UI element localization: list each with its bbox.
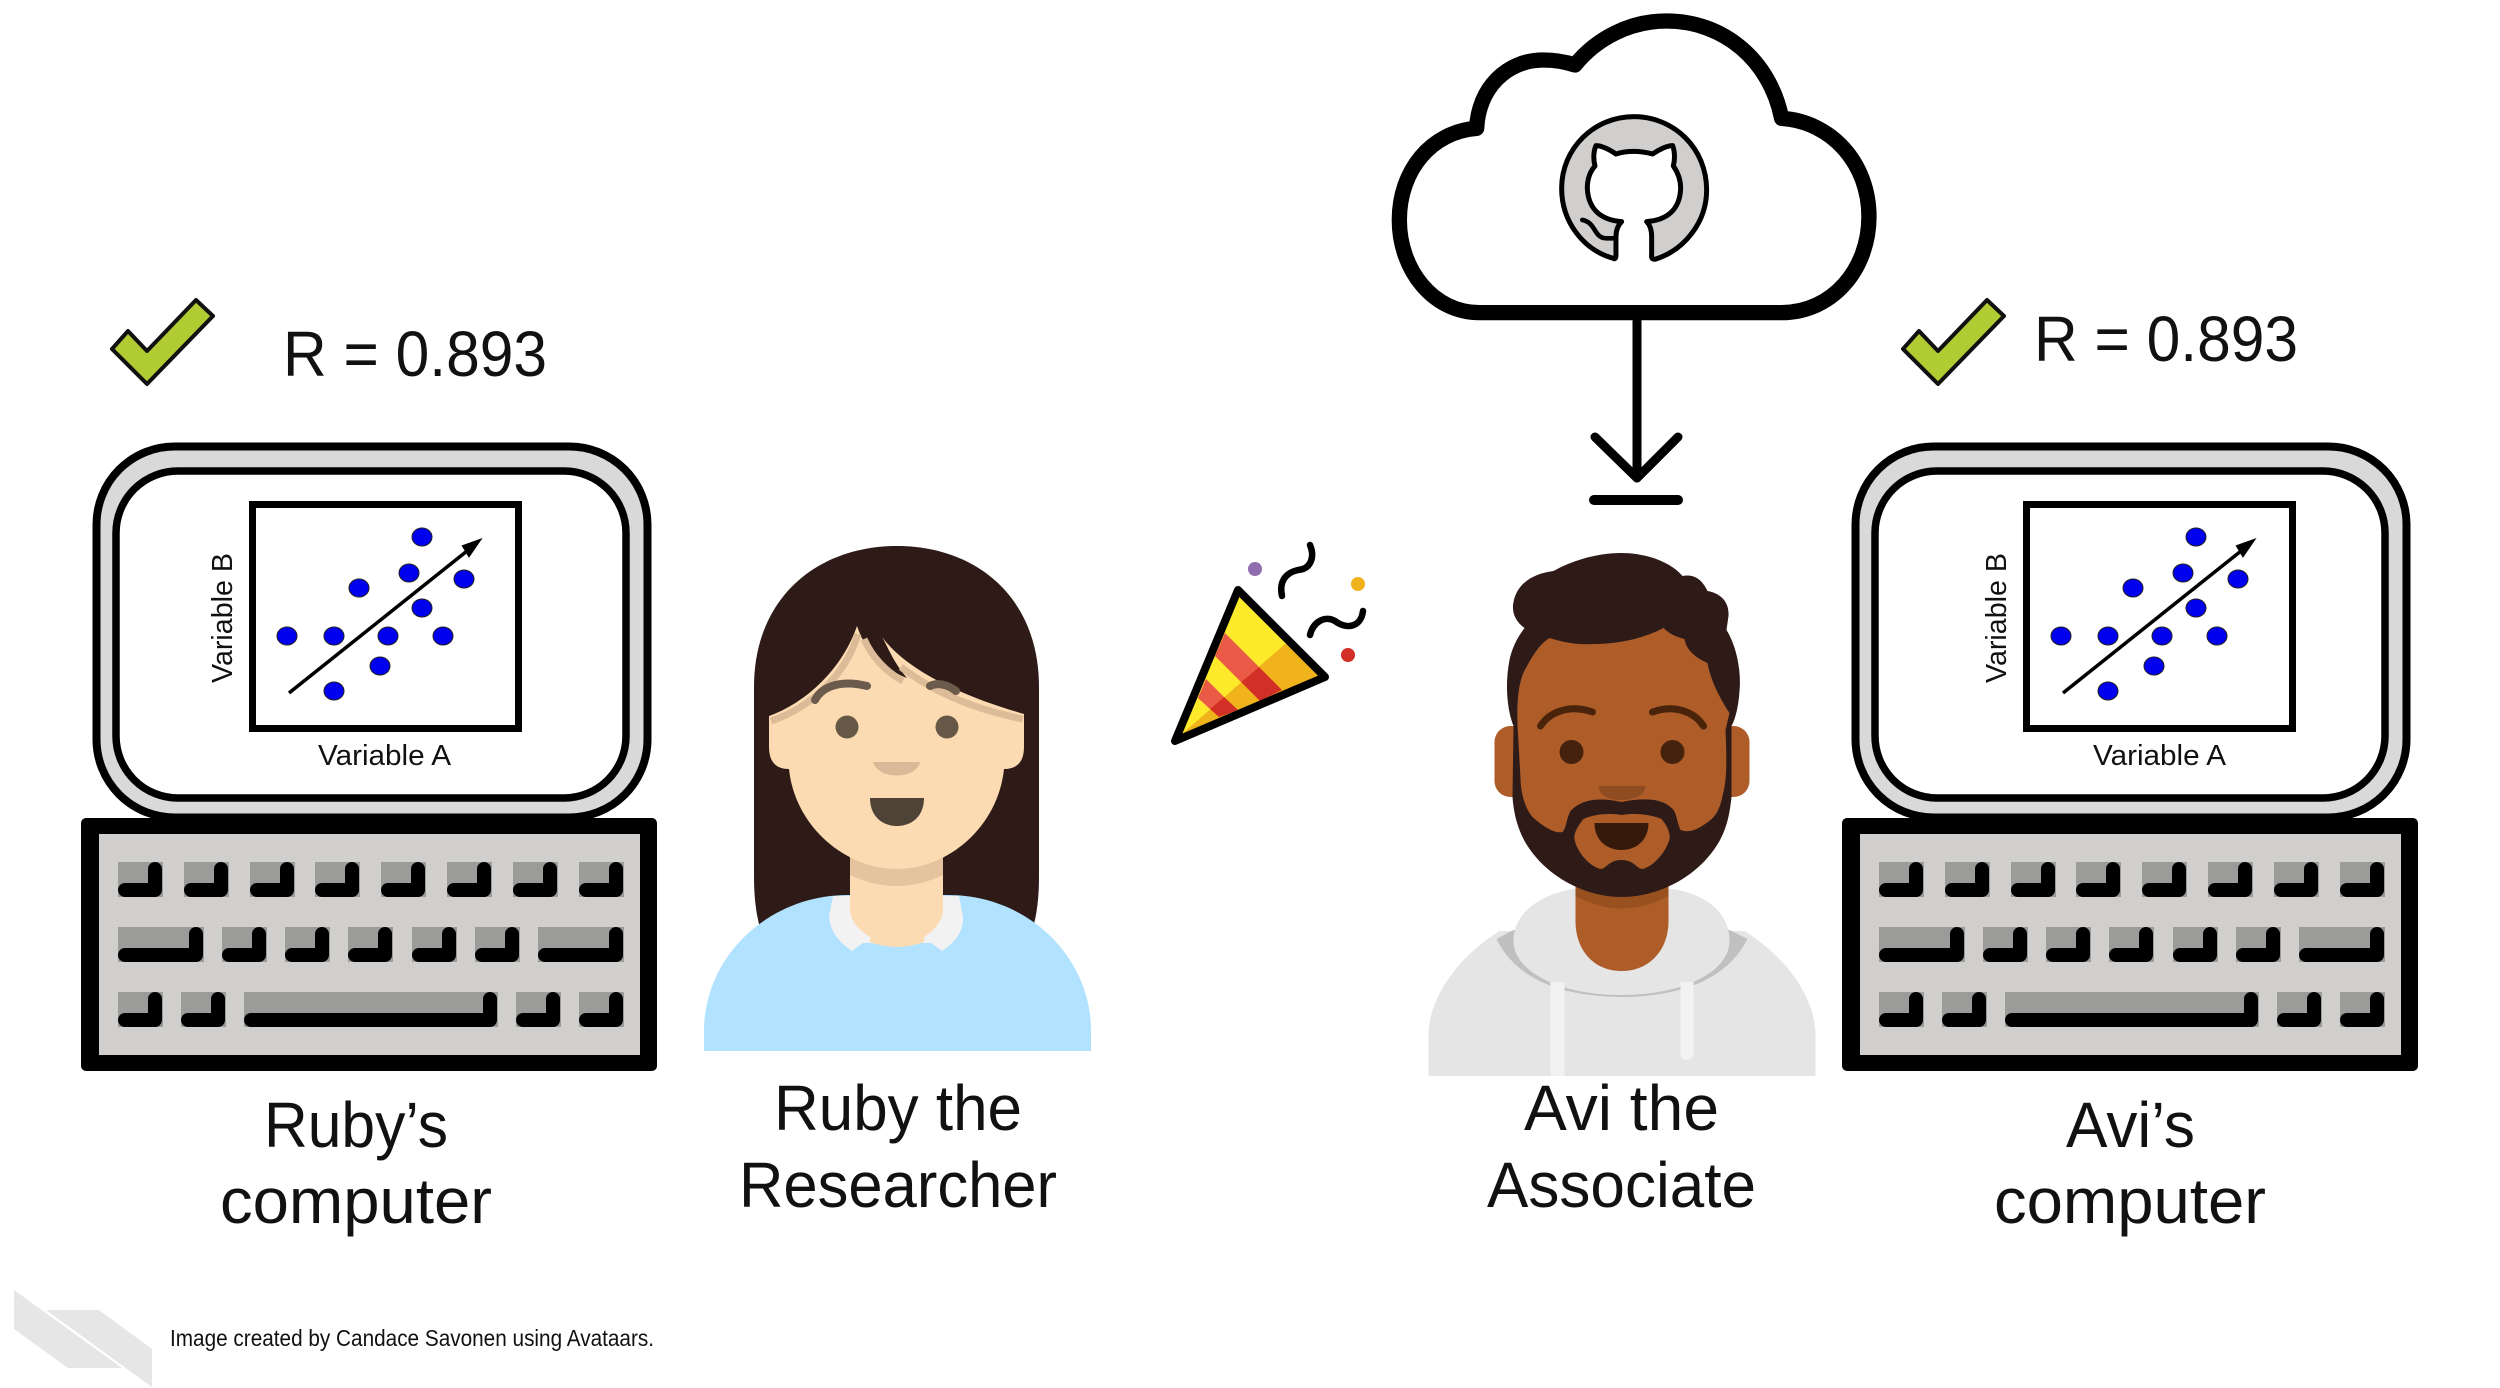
caption: Ruby's computer: computer [220, 1165, 492, 1237]
eyebrows [815, 684, 867, 700]
mouth [870, 798, 924, 826]
scatter chart: Ruby's screen [207, 504, 518, 772]
shirt [704, 895, 1091, 1051]
y axis label: Variable B [1981, 553, 2013, 683]
caption: Ruby the Researcher: Ruby the [774, 1072, 1022, 1144]
hair [754, 546, 1039, 942]
right result: R = 0.893: R = 0.893 [2034, 303, 2298, 375]
data points [277, 528, 474, 700]
caption: Ruby's computer [220, 1089, 492, 1237]
hair and beard [1507, 553, 1740, 897]
caption: Ruby's computer: Ruby’s [264, 1089, 448, 1161]
neck [1576, 876, 1668, 971]
trend arrow [2063, 540, 2254, 693]
caption: Avi's computer [1994, 1089, 2266, 1237]
image credit: Image created by Candace Savonen using Avataars. [170, 1325, 654, 1351]
hood [1514, 888, 1730, 995]
caption: Ruby the Researcher: Researcher [739, 1149, 1057, 1221]
nose [873, 762, 920, 776]
avatar: Ruby [704, 546, 1091, 1051]
collar [829, 896, 963, 951]
panel: Ruby's computer [81, 446, 657, 1071]
ears [1494, 726, 1534, 797]
mouth [1594, 823, 1648, 850]
monitor [96, 446, 648, 818]
caption: Avi the Associate: Associate [1487, 1149, 1756, 1221]
caption: Avi's computer: Avi’s [2066, 1089, 2195, 1161]
icon: right check mark [1903, 300, 2004, 384]
icon: GitHub cloud [1399, 21, 1869, 313]
x axis label: Variable A [2093, 740, 2227, 772]
hoodie body [1428, 931, 1816, 1076]
nose [1598, 786, 1646, 800]
icon: left check mark [112, 300, 213, 384]
neck [850, 857, 943, 947]
keyboard [1842, 818, 2418, 1071]
left result: R = 0.893: R = 0.893 [283, 318, 547, 390]
fringe shadow [771, 634, 1023, 721]
GitHub logo [1562, 117, 1707, 259]
cloud outline [1399, 21, 1869, 313]
keyboard [81, 818, 657, 1071]
caption: Avi's computer: computer [1994, 1165, 2266, 1237]
icon: party popper [1165, 545, 1365, 757]
arrow: download from cloud [1594, 321, 1678, 500]
panel: Avi's computer [1842, 446, 2418, 1071]
eyes [1560, 740, 1684, 764]
hood shadow [1496, 930, 1748, 997]
eyebrows [1540, 709, 1592, 726]
logo watermark [14, 1290, 152, 1387]
eyes [836, 716, 958, 738]
caption: Avi the Associate: Avi the [1524, 1072, 1719, 1144]
face [769, 626, 1024, 869]
scatter chart: Avi's screen [1981, 504, 2292, 772]
neck shadow [850, 857, 943, 886]
data points [2051, 528, 2248, 700]
avatar: Avi [1428, 553, 1816, 1076]
hoodie strings [1550, 982, 1564, 1076]
monitor [1856, 446, 2406, 818]
trend arrow [289, 540, 480, 693]
y axis label: Variable B [207, 553, 239, 683]
caption: Ruby the Researcher [739, 1072, 1057, 1221]
x axis label: Variable A [318, 740, 452, 772]
chin skin [1574, 814, 1670, 869]
caption: Avi the Associate [1487, 1072, 1756, 1221]
face [1517, 628, 1730, 832]
